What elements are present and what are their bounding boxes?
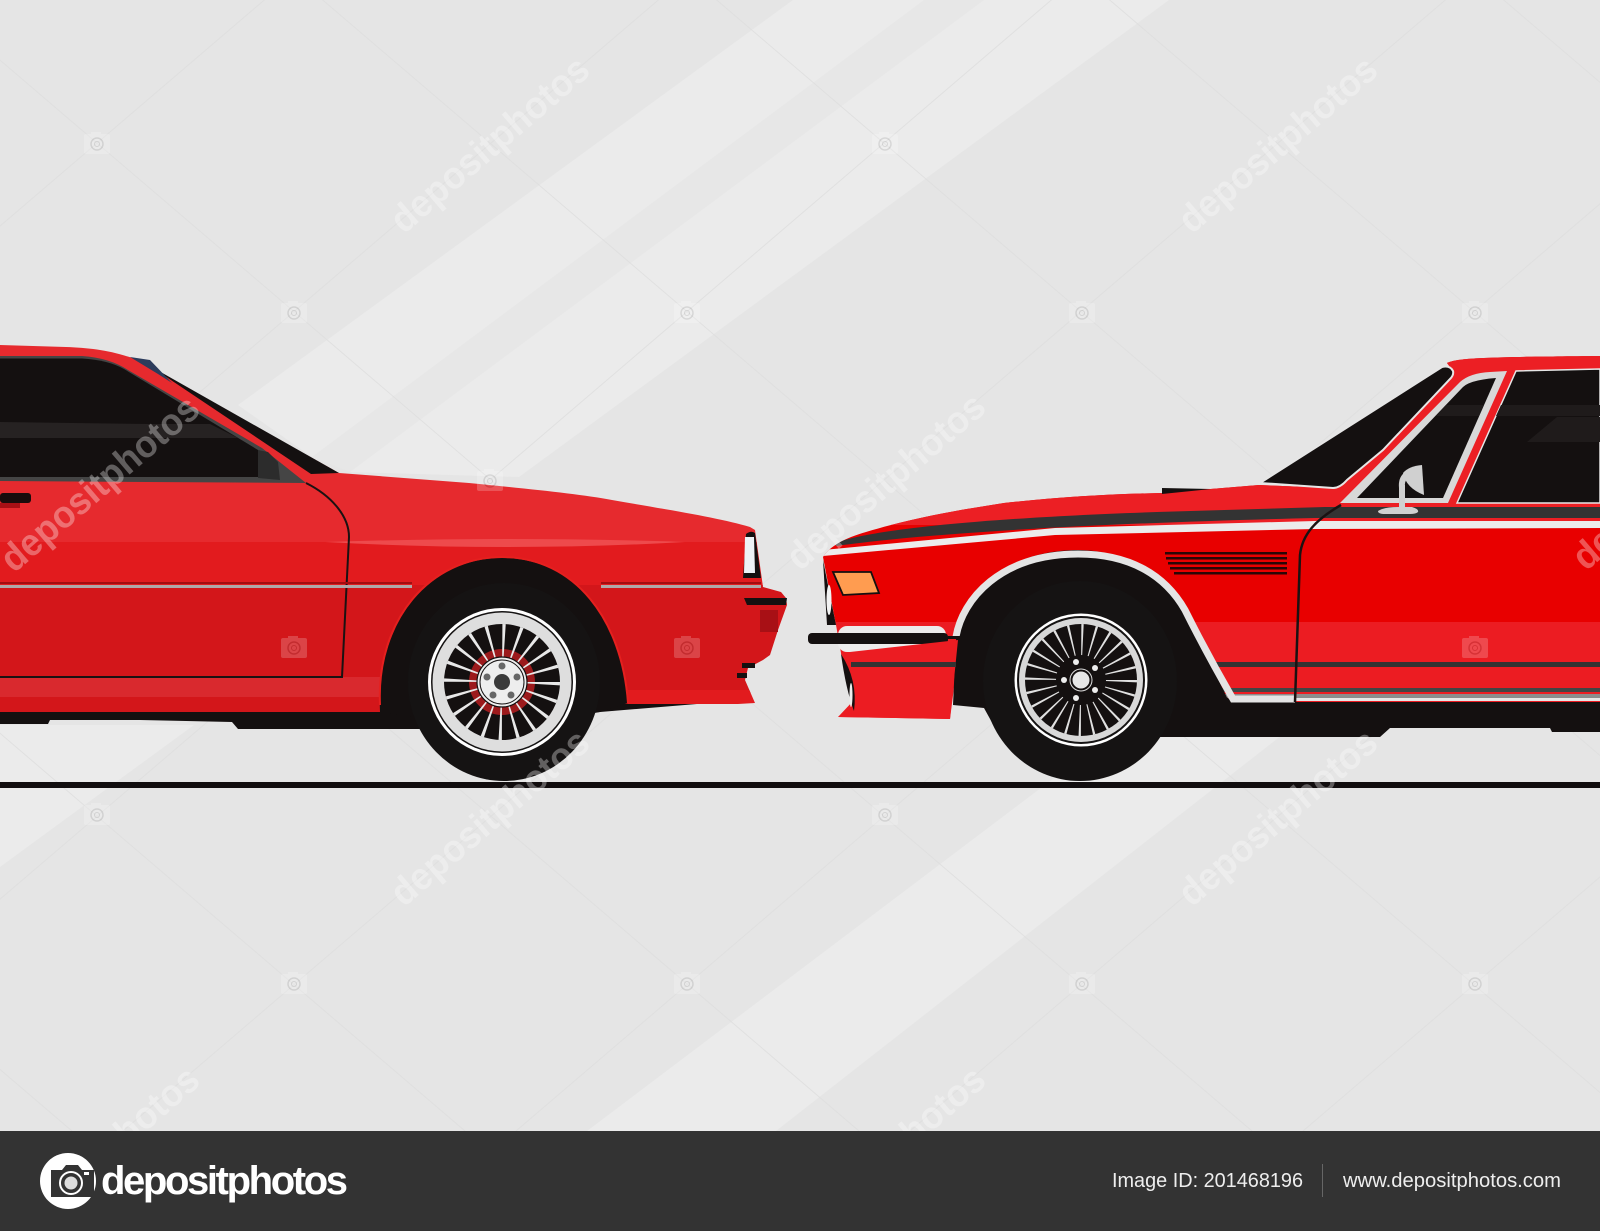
left car side window — [0, 356, 306, 483]
right car indicator — [833, 572, 879, 595]
left car door handle — [0, 493, 31, 508]
left car windshield — [150, 366, 339, 474]
watermark: repeated diagonal text: depositphotos — [1170, 721, 1386, 915]
right car side window — [1340, 371, 1507, 503]
right car wheel arch — [953, 550, 1229, 737]
watermark: small camera icons — [84, 132, 1488, 994]
right car headlight — [823, 560, 836, 625]
right car bumper — [808, 626, 960, 652]
right car fender trim — [956, 554, 1295, 699]
ground line — [0, 782, 1600, 788]
right car fender vent — [1165, 552, 1287, 574]
left car underbody — [0, 690, 709, 729]
left car bumper details — [737, 598, 787, 678]
right car hood stripes — [836, 507, 1600, 546]
right car rear window — [1457, 369, 1600, 503]
right car lower valance — [838, 640, 958, 719]
right car wiper — [1162, 488, 1211, 494]
right car side mirror — [1378, 465, 1424, 514]
left car headlight — [743, 532, 761, 578]
right car wheel — [983, 581, 1177, 781]
footer image id: Image ID: 201468196 — [1112, 1170, 1303, 1192]
watermark: repeated diagonal text: depositphotos — [1170, 48, 1386, 242]
left car wheel — [408, 583, 600, 781]
right car — [800, 340, 1600, 781]
right car body — [800, 340, 1600, 722]
footer bar — [0, 1131, 1600, 1231]
left car wheel arch — [380, 557, 628, 730]
left car side mirror — [258, 450, 280, 480]
right car underbody — [1000, 690, 1600, 737]
footer logo wordmark: depositphotos — [101, 1159, 348, 1203]
watermark: repeated diagonal text: depositphotos — [382, 48, 598, 242]
left car body — [0, 340, 800, 713]
watermark: repeated diagonal text: depositphotos — [382, 721, 598, 915]
right car windshield — [1260, 366, 1453, 488]
left car door lines — [0, 483, 349, 677]
right car door line — [1295, 505, 1341, 702]
watermark: repeated diagonal text: depositphotos — [778, 385, 994, 579]
footer logo icon — [40, 1153, 96, 1209]
footer website: www.depositphotos.com — [1342, 1170, 1561, 1192]
left car trim strips — [0, 582, 761, 588]
left car — [0, 340, 800, 781]
